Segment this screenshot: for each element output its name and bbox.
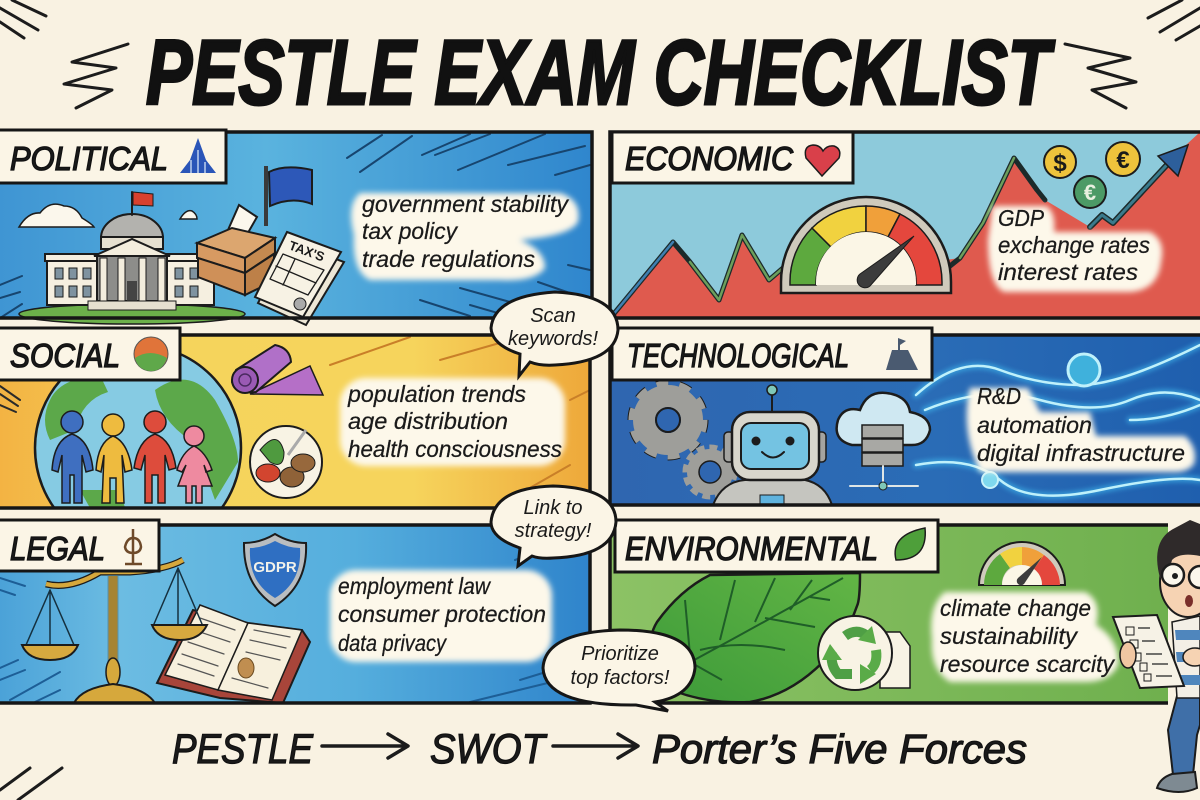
text block: environmental factors: resource scarcity xyxy=(940,651,1115,677)
icon: flag xyxy=(266,166,312,226)
text block: environmental factors: sustainability xyxy=(940,623,1079,649)
arrow xyxy=(322,734,408,758)
icon: clouds xyxy=(19,204,197,227)
callout: link to strategy: strategy! xyxy=(515,520,592,542)
heading: environmental: ENVIRONMENTAL xyxy=(625,530,878,567)
text block: technological factors: automation xyxy=(977,412,1092,438)
callout: scan keywords xyxy=(491,292,618,376)
icon: capitol building xyxy=(19,192,245,324)
glasses xyxy=(1162,564,1184,586)
text block: social factors xyxy=(347,381,562,462)
text block: political factors: government stability xyxy=(362,191,570,217)
callout: link to strategy: Link to xyxy=(524,497,582,519)
heading: economic xyxy=(612,132,853,183)
text bubble xyxy=(330,570,552,662)
chart: red mountain line xyxy=(612,132,1200,318)
heading: political: POLITICAL xyxy=(10,140,168,177)
legs and shoe xyxy=(1168,696,1200,775)
text block: technological factors xyxy=(977,383,1185,466)
text block: political factors: tax policy xyxy=(362,218,458,244)
text bubble xyxy=(340,378,565,466)
flow: pestle to swot to porter's five forces: Porter’s Five Forces xyxy=(652,726,1027,772)
icon: scales of justice xyxy=(46,560,183,703)
heading: technological xyxy=(612,328,932,380)
icon: robot xyxy=(713,385,832,505)
icon: cloud server xyxy=(837,393,930,490)
speed lines xyxy=(0,134,590,318)
icon: big leaf xyxy=(650,573,860,702)
scale pans xyxy=(22,568,207,660)
heading: environmental xyxy=(615,520,938,572)
flow: pestle to swot to porter's five forces xyxy=(172,725,1027,772)
head xyxy=(1160,547,1200,617)
icon: coins: € xyxy=(1116,147,1130,174)
text block: legal factors: consumer protection xyxy=(338,601,546,627)
arrow xyxy=(553,734,638,758)
heading: social xyxy=(0,328,180,380)
text block: technological factors: R&D xyxy=(977,383,1021,409)
text block: economic factors: interest rates xyxy=(998,259,1139,285)
icon: tax document: TAX'S xyxy=(287,238,327,265)
icon: coins: $ xyxy=(1053,150,1067,177)
icon: globe with people xyxy=(34,353,242,506)
text bubble xyxy=(351,193,579,280)
panel: legal xyxy=(0,525,590,703)
heading: social: SOCIAL xyxy=(10,337,120,374)
panel: social xyxy=(0,333,592,510)
icon: gears xyxy=(631,383,735,497)
icon: recycling symbol xyxy=(818,616,910,690)
text block: social factors: health consciousness xyxy=(348,436,562,462)
icon: healthy food plate xyxy=(250,426,322,498)
text block: legal factors: employment law xyxy=(338,573,491,599)
icon: GDPR shield xyxy=(244,534,306,606)
flow: pestle to swot to porter's five forces: PESTLE xyxy=(172,725,314,772)
text block: legal factors: data privacy xyxy=(338,630,447,656)
text bubble xyxy=(931,592,1118,682)
icon: ballot box xyxy=(197,205,275,295)
text bubble xyxy=(988,206,1162,292)
callout: prioritize top factors xyxy=(543,630,695,711)
callout: link to strategy xyxy=(491,486,616,566)
callout: prioritize top factors: Prioritize xyxy=(581,643,659,665)
callout: scan keywords: Scan xyxy=(530,305,576,327)
icon: open law book xyxy=(157,605,310,703)
panel: environmental xyxy=(610,525,1168,703)
text block: political factors: trade regulations xyxy=(362,246,535,272)
checklist sheet xyxy=(1113,615,1184,688)
text block: economic factors: GDP xyxy=(998,205,1045,231)
striped shirt xyxy=(1172,616,1200,698)
text block: environmental factors xyxy=(940,595,1115,677)
text block: political factors xyxy=(362,191,570,272)
text block: technological factors: digital infrastructure xyxy=(977,440,1185,466)
data waves xyxy=(916,345,1200,496)
text bubble xyxy=(967,388,1195,472)
chart: gauge xyxy=(979,542,1065,585)
heading: legal xyxy=(0,520,159,571)
text block: social factors: population trends xyxy=(347,381,526,407)
text block: economic factors xyxy=(998,205,1150,285)
callout: prioritize top factors: top factors! xyxy=(571,667,670,689)
text block: economic factors: exchange rates xyxy=(998,232,1150,258)
icon: coins xyxy=(1044,142,1140,208)
text block: social factors: age distribution xyxy=(348,408,508,434)
callout: scan keywords: keywords! xyxy=(508,328,598,350)
illustration: student with checklist xyxy=(1113,520,1200,792)
text block: legal factors xyxy=(338,573,546,656)
icon: GDPR shield: GDPR xyxy=(253,559,297,576)
heading: legal: LEGAL xyxy=(10,530,105,567)
panel: technological xyxy=(610,335,1200,505)
flow: pestle to swot to porter's five forces: SWOT xyxy=(430,725,548,772)
panel: political xyxy=(0,132,592,325)
heading: technological: TECHNOLOGICAL xyxy=(627,337,849,374)
panel: economic xyxy=(610,132,1200,318)
icon: coins: € xyxy=(1084,180,1096,205)
icon: tax document xyxy=(255,232,344,325)
text block: environmental factors: climate change xyxy=(940,595,1091,621)
chart: gauge xyxy=(781,197,951,293)
icon: yoga mat xyxy=(232,345,323,395)
heading: economic: ECONOMIC xyxy=(625,140,794,177)
heading: political xyxy=(0,130,226,183)
